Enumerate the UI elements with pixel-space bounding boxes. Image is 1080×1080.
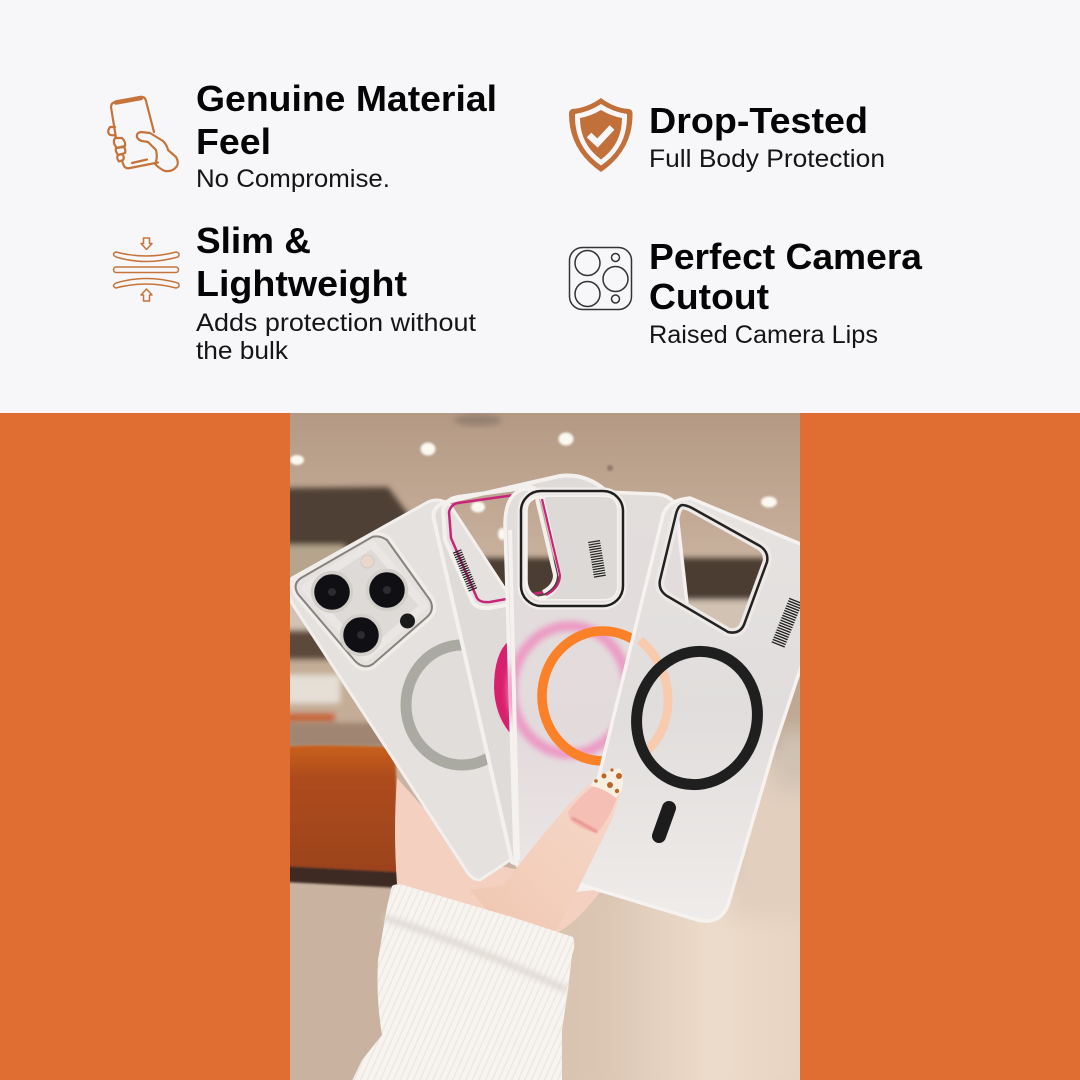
subtext: adds protection: Adds protection without [196, 309, 476, 337]
faded peach ring seen through [640, 640, 668, 757]
orange band right [800, 413, 1080, 1080]
hand palm and fingers behind phones [395, 778, 600, 935]
feature: perfect camera cutout [570, 236, 923, 349]
sofa [285, 746, 400, 888]
barcode [457, 551, 473, 590]
feature: slim and lightweight [114, 220, 476, 365]
phone case 1: gray ring with lenses [290, 498, 510, 882]
heading: perfect camera cutout: Perfect Camera [649, 236, 923, 277]
pill magnet [659, 808, 669, 836]
gray magnetic ring [400, 640, 488, 770]
orange ring [537, 626, 632, 766]
barcode [594, 541, 600, 577]
icon: compression arrows and layers [114, 238, 179, 301]
heading: perfect camera cutout: Cutout [649, 276, 769, 317]
barcode [778, 600, 796, 645]
leopard nail tip [590, 768, 623, 798]
camera island [296, 536, 432, 666]
heading: slim and lightweight: Lightweight [196, 263, 407, 304]
subtext: full body protection: Full Body Protection [649, 145, 885, 173]
photo: hand holding four phone cases [270, 413, 820, 1080]
heading: genuine material feel: Genuine Material [196, 78, 497, 119]
photo background: blurred interior [270, 413, 820, 1080]
floor [558, 724, 800, 1080]
orange band left [0, 413, 290, 1080]
icon: hand holding phone [108, 97, 178, 171]
phone 2 pink stripe showing through window [537, 499, 555, 592]
phone case 3: orange ring [505, 489, 700, 900]
subtext: raised camera lips: Raised Camera Lips [649, 321, 878, 349]
heading: genuine material feel: Feel [196, 121, 271, 162]
subtext: adds protection: the bulk [196, 337, 289, 365]
thumb with nail [470, 768, 624, 935]
phone case 2: magenta accents [432, 474, 606, 892]
feature: drop-tested [569, 98, 885, 173]
heading: slim and lightweight: Slim & [196, 220, 311, 261]
ceiling lights [290, 432, 777, 540]
ribbed white sleeve [350, 884, 574, 1080]
icon: camera module [570, 248, 632, 310]
phone case 4: black ring [575, 498, 810, 921]
magenta ring fragment [494, 640, 510, 733]
blurred pink ring [512, 626, 628, 754]
icon: shield with check [569, 98, 633, 172]
subtext: no compromise: No Compromise. [196, 165, 390, 193]
feature: genuine material feel [108, 78, 497, 193]
heading: drop-tested: Drop-Tested [649, 100, 868, 141]
camera outline black [521, 491, 623, 606]
black magnetic ring [631, 646, 763, 790]
